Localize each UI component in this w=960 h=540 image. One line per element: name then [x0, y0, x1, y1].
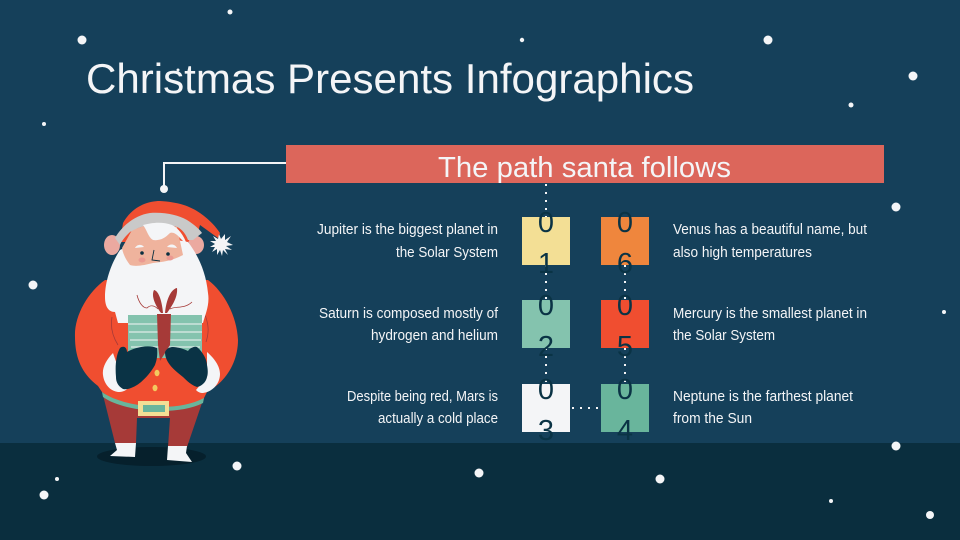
text: step 03 Mars: actually a cold place — [378, 410, 498, 427]
ears — [104, 235, 204, 255]
coat — [75, 280, 238, 408]
step 03 — [522, 374, 570, 447]
step 05: 5 — [617, 331, 633, 363]
coat buttons — [152, 370, 160, 391]
step 01 — [522, 207, 570, 280]
step 06: 6 — [617, 248, 633, 280]
text: step 05 Mercury — [673, 305, 867, 344]
santa illustration — [75, 201, 238, 466]
text: step 06 Venus — [673, 221, 868, 261]
cheeks — [138, 256, 174, 262]
step 05 — [601, 290, 649, 363]
step 04 — [601, 374, 649, 447]
step 02 — [522, 290, 570, 363]
beard — [105, 235, 208, 323]
arm lines — [111, 315, 208, 345]
step 06: 0 — [617, 207, 633, 239]
banner: the path santa follows — [286, 145, 884, 184]
shadow — [97, 447, 206, 466]
text: step 05 Mercury: Mercury is the smallest planet in — [673, 305, 867, 322]
buckle — [138, 401, 169, 416]
text: step 04 Neptune: from the Sun — [673, 410, 752, 427]
text: step 02 Saturn: Saturn is composed mostly of — [319, 305, 499, 322]
eyes and nose — [140, 250, 170, 261]
title: Christmas Presents Infographics — [86, 55, 694, 102]
text: step 02 Saturn: hydrogen and helium — [371, 327, 498, 344]
legs — [103, 395, 203, 447]
text: step 03 Mars: Despite being red, Mars is — [347, 388, 498, 405]
step 05: 0 — [617, 290, 633, 322]
hat band — [115, 213, 202, 245]
text: step 03 Mars — [347, 388, 498, 427]
banner: the path santa follows: The path santa follows — [438, 152, 731, 184]
face — [122, 224, 183, 266]
pompom — [210, 234, 233, 256]
step 02: 0 — [538, 290, 554, 322]
step 04: 4 — [617, 415, 633, 447]
connector line from santa to banner — [160, 163, 286, 193]
mittens — [116, 346, 208, 389]
ground — [0, 443, 960, 540]
step 01: 1 — [538, 248, 554, 280]
step 06 — [601, 207, 649, 280]
hair — [143, 223, 187, 245]
step 04: 0 — [617, 374, 633, 406]
text: step 06 Venus: also high temperatures — [673, 244, 812, 261]
step 01: 0 — [538, 207, 554, 239]
cuffs — [103, 352, 220, 393]
belt — [102, 392, 204, 411]
text: step 02 Saturn — [319, 305, 499, 344]
text: step 01 Jupiter: Jupiter is the biggest planet in — [317, 221, 498, 238]
text: step 04 Neptune — [673, 388, 854, 427]
gift box — [128, 288, 202, 361]
text: step 05 Mercury: the Solar System — [673, 327, 775, 344]
step 03: 0 — [538, 374, 554, 406]
eyebrows — [135, 244, 177, 248]
text: step 06 Venus: Venus has a beautiful name, but — [673, 221, 868, 238]
text: step 01 Jupiter — [317, 221, 498, 261]
step 02: 2 — [538, 331, 554, 363]
step 03: 3 — [538, 415, 554, 447]
hat — [120, 201, 220, 242]
text: step 01 Jupiter: the Solar System — [396, 244, 498, 261]
boots — [110, 443, 192, 462]
text: step 04 Neptune: Neptune is the farthest planet — [673, 388, 854, 405]
dotted path between steps — [546, 184, 625, 408]
